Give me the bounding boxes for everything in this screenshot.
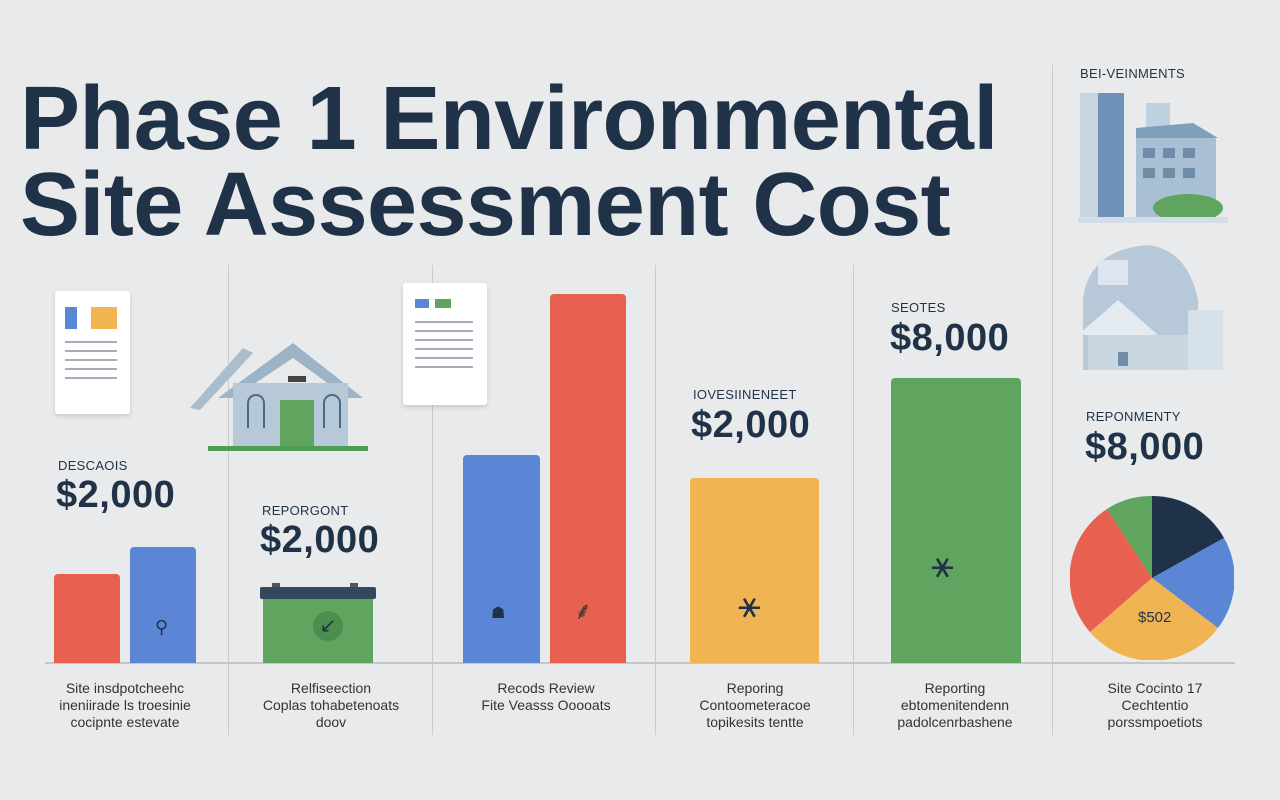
text: $8,000 (1085, 426, 1204, 468)
panel 1: values: DESCAOIS (58, 458, 128, 473)
captions: cocipnte estevate (71, 714, 179, 730)
text: porssmpoetiots (1108, 714, 1202, 730)
panel 5: SEOTES (891, 300, 946, 315)
text: padolcenrbashene (897, 714, 1013, 730)
text: ebtomenitendenn (901, 697, 1009, 713)
text: $2,000 (56, 474, 175, 516)
pie chart: $502 (1138, 609, 1171, 626)
pie chart (1070, 496, 1234, 660)
captions (59, 680, 191, 730)
panel 2: REPORGONT (262, 503, 348, 518)
captions: ineniirade ls troesinie (59, 697, 191, 713)
panel 6 header: BEI-VEINMENTS (1080, 66, 1185, 81)
bar chart 3 (463, 294, 626, 663)
text: Reporting (925, 680, 985, 696)
text: $2,000 (260, 519, 379, 561)
text: topikesits tentte (706, 714, 804, 730)
text: $2,000 (691, 404, 810, 446)
text: Site Cocinto 17 (1108, 680, 1202, 696)
text: $8,000 (890, 317, 1009, 359)
title (20, 69, 998, 255)
panel 6 value: REPONMENTY (1086, 409, 1181, 424)
panel 4: IOVESIINENEET (693, 387, 797, 402)
icon: green box (260, 583, 376, 663)
title: Site Assessment Cost (20, 155, 950, 255)
icon: house blue (1083, 245, 1223, 370)
bar chart 3: ⸙ (574, 598, 592, 625)
icon: house (190, 343, 368, 451)
text: ⚹ (931, 544, 954, 586)
text: ⚹ (738, 584, 761, 626)
icon: document 1 (55, 291, 130, 414)
text: Cechtentio (1122, 697, 1188, 713)
text: Relfiseection (291, 680, 371, 696)
captions: Site insdpotcheehc (66, 680, 184, 696)
text: doov (316, 714, 346, 730)
text: Contoometeracoe (699, 697, 811, 713)
text: Reporing (727, 680, 783, 696)
bar chart 1: ⚲ (155, 617, 168, 637)
text: Coplas tohabetenoats (263, 697, 399, 713)
text: Fite Veasss Ooooats (481, 697, 611, 713)
icon: green box: ↙ (320, 615, 336, 637)
icon: document 2 (403, 283, 487, 405)
text: Recods Review (497, 680, 595, 696)
icon: buildings (1078, 93, 1228, 223)
title: Phase 1 Environmental (20, 69, 998, 169)
bar chart 1 (54, 547, 196, 663)
bar chart 3: ☗ (491, 605, 505, 622)
